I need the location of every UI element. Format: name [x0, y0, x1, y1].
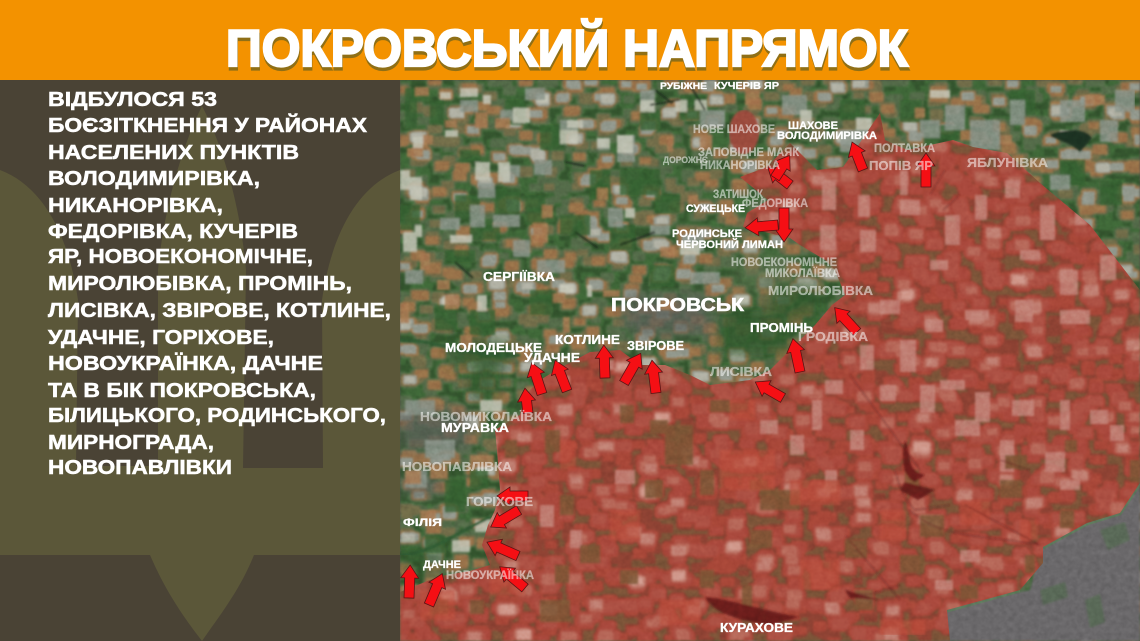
icon: trident watermark	[0, 106, 400, 641]
map labels: highlighted settlements: РУБІЖНЕ	[660, 81, 707, 91]
text block: clashes summary: МИРНОГРАДА,	[48, 431, 214, 454]
text block: clashes summary: ЯР, НОВОЕКОНОМІЧНЕ,	[48, 245, 313, 268]
map labels: faded settlements: ЯБЛУНІВКА	[967, 155, 1049, 170]
map labels: highlighted settlements: ВОЛОДИМИРІВКА	[777, 130, 877, 142]
text block: clashes summary: НАСЕЛЕНИХ ПУНКТІВ	[48, 141, 299, 164]
map labels: highlighted settlements: ЗВІРОВЕ	[627, 339, 684, 353]
map labels: faded settlements: НОВОУКРАЇНКА	[446, 569, 534, 582]
map labels: highlighted settlements: МОЛОДЕЦЬКЕ	[445, 341, 542, 355]
map labels: highlighted settlements: ШАХОВЕ	[788, 120, 838, 132]
arrows: attack directions	[400, 139, 935, 609]
map labels: highlighted settlements: КОТЛИНЕ	[555, 333, 620, 347]
text block: clashes summary: НОВОПАВЛІВКИ	[48, 456, 232, 479]
map labels: faded settlements: ФЕДОРІВКА	[742, 198, 808, 210]
map labels: faded settlements: НОВОЕКОНОМІЧНЕ	[731, 257, 837, 269]
map labels: faded settlements: НОВЕ ШАХОВЕ	[693, 124, 775, 136]
map labels: highlighted settlements: КУЧЕРІВ ЯР	[714, 81, 779, 92]
text block: clashes summary: УДАЧНЕ, ГОРІХОВЕ,	[48, 326, 274, 349]
text block: clashes summary: ФЕДОРІВКА, КУЧЕРІВ	[48, 220, 298, 243]
text block: clashes summary	[48, 88, 391, 479]
map: occupied territory	[400, 80, 1140, 641]
map labels: faded settlements: ДОРОЖНЄ	[663, 155, 709, 165]
map labels: highlighted settlements: УДАЧНЕ	[524, 351, 580, 365]
map labels: highlighted settlements	[403, 81, 877, 635]
map labels: faded settlements: НОВОМИКОЛАЇВКА	[420, 409, 553, 424]
title: ПОКРОВСЬКИЙ НАПРЯМОК	[226, 22, 909, 82]
map labels: faded settlements: ПОПІВ ЯР	[869, 158, 933, 173]
map labels: highlighted settlements: ФІЛІЯ	[403, 517, 442, 529]
map labels: faded settlements: ЛИСІВКА	[710, 364, 773, 379]
map labels: highlighted settlements: ЧЕРВОНИЙ ЛИМАН	[676, 238, 783, 251]
map labels: faded settlements: ПОЛТАВКА	[874, 143, 935, 155]
map labels: faded settlements: ЗАПОВІДНЕ МАЯК	[698, 147, 800, 159]
map labels: highlighted settlements: КУРАХОВЕ	[720, 621, 793, 635]
text block: clashes summary: БОЄЗІТКНЕННЯ У РАЙОНАХ	[48, 113, 367, 137]
text block: clashes summary: ТА В БІК ПОКРОВСЬКА,	[48, 379, 316, 402]
text block: clashes summary: МИРОЛЮБІВКА, ПРОМІНЬ,	[48, 272, 352, 295]
text block: clashes summary: ВОЛОДИМИРІВКА,	[48, 167, 260, 190]
map labels: faded settlements: НОВОПАВЛІВКА	[402, 459, 513, 474]
map labels: faded settlements: НИКАНОРІВКА	[700, 160, 780, 172]
text block: clashes summary: БІЛИЦЬКОГО, РОДИНСЬКОГО,	[48, 404, 386, 427]
text block: clashes summary: НИКАНОРІВКА,	[48, 194, 223, 217]
map: texture	[400, 80, 1140, 641]
text block: clashes summary: НОВОУКРАЇНКА, ДАЧНЕ	[48, 352, 323, 375]
map labels: faded settlements: ЗАТИШОК	[713, 189, 764, 201]
map labels: highlighted settlements: РОДИНСЬКЕ	[672, 228, 742, 240]
map: occupied patch near Nove Shakhove	[729, 110, 759, 154]
text block: clashes summary: ВІДБУЛОСЯ 53	[48, 88, 217, 111]
panel: left text background	[0, 80, 400, 641]
title: ПОКРОВСЬКИЙ НАПРЯМОК	[226, 19, 908, 78]
map labels: faded settlements: МИРОЛЮБІВКА	[768, 283, 874, 298]
map labels: highlighted settlements: СЕРГІЇВКА	[483, 269, 555, 284]
map labels: faded settlements: ГРОДІВКА	[798, 329, 869, 344]
map labels: faded settlements: МИКОЛАЇВКА	[765, 267, 840, 280]
map labels: highlighted settlements: СУЖЕЦЬКЕ	[686, 203, 745, 215]
text block: clashes summary: ЛИСІВКА, ЗВІРОВЕ, КОТЛИНЕ,	[48, 299, 391, 322]
map: satellite base with occupied area	[400, 80, 1140, 641]
map labels: highlighted settlements: ПОКРОВСЬК	[611, 294, 745, 315]
map labels: faded settlements	[402, 124, 1049, 582]
map labels: highlighted settlements: ДАЧНЕ	[423, 559, 461, 571]
map: city area	[940, 470, 1140, 641]
map labels: faded settlements: ГОРІХОВЕ	[466, 494, 533, 509]
map labels: highlighted settlements: МУРАВКА	[441, 421, 509, 435]
header bar	[0, 0, 1140, 82]
map labels: highlighted settlements: ПРОМІНЬ	[750, 321, 813, 335]
